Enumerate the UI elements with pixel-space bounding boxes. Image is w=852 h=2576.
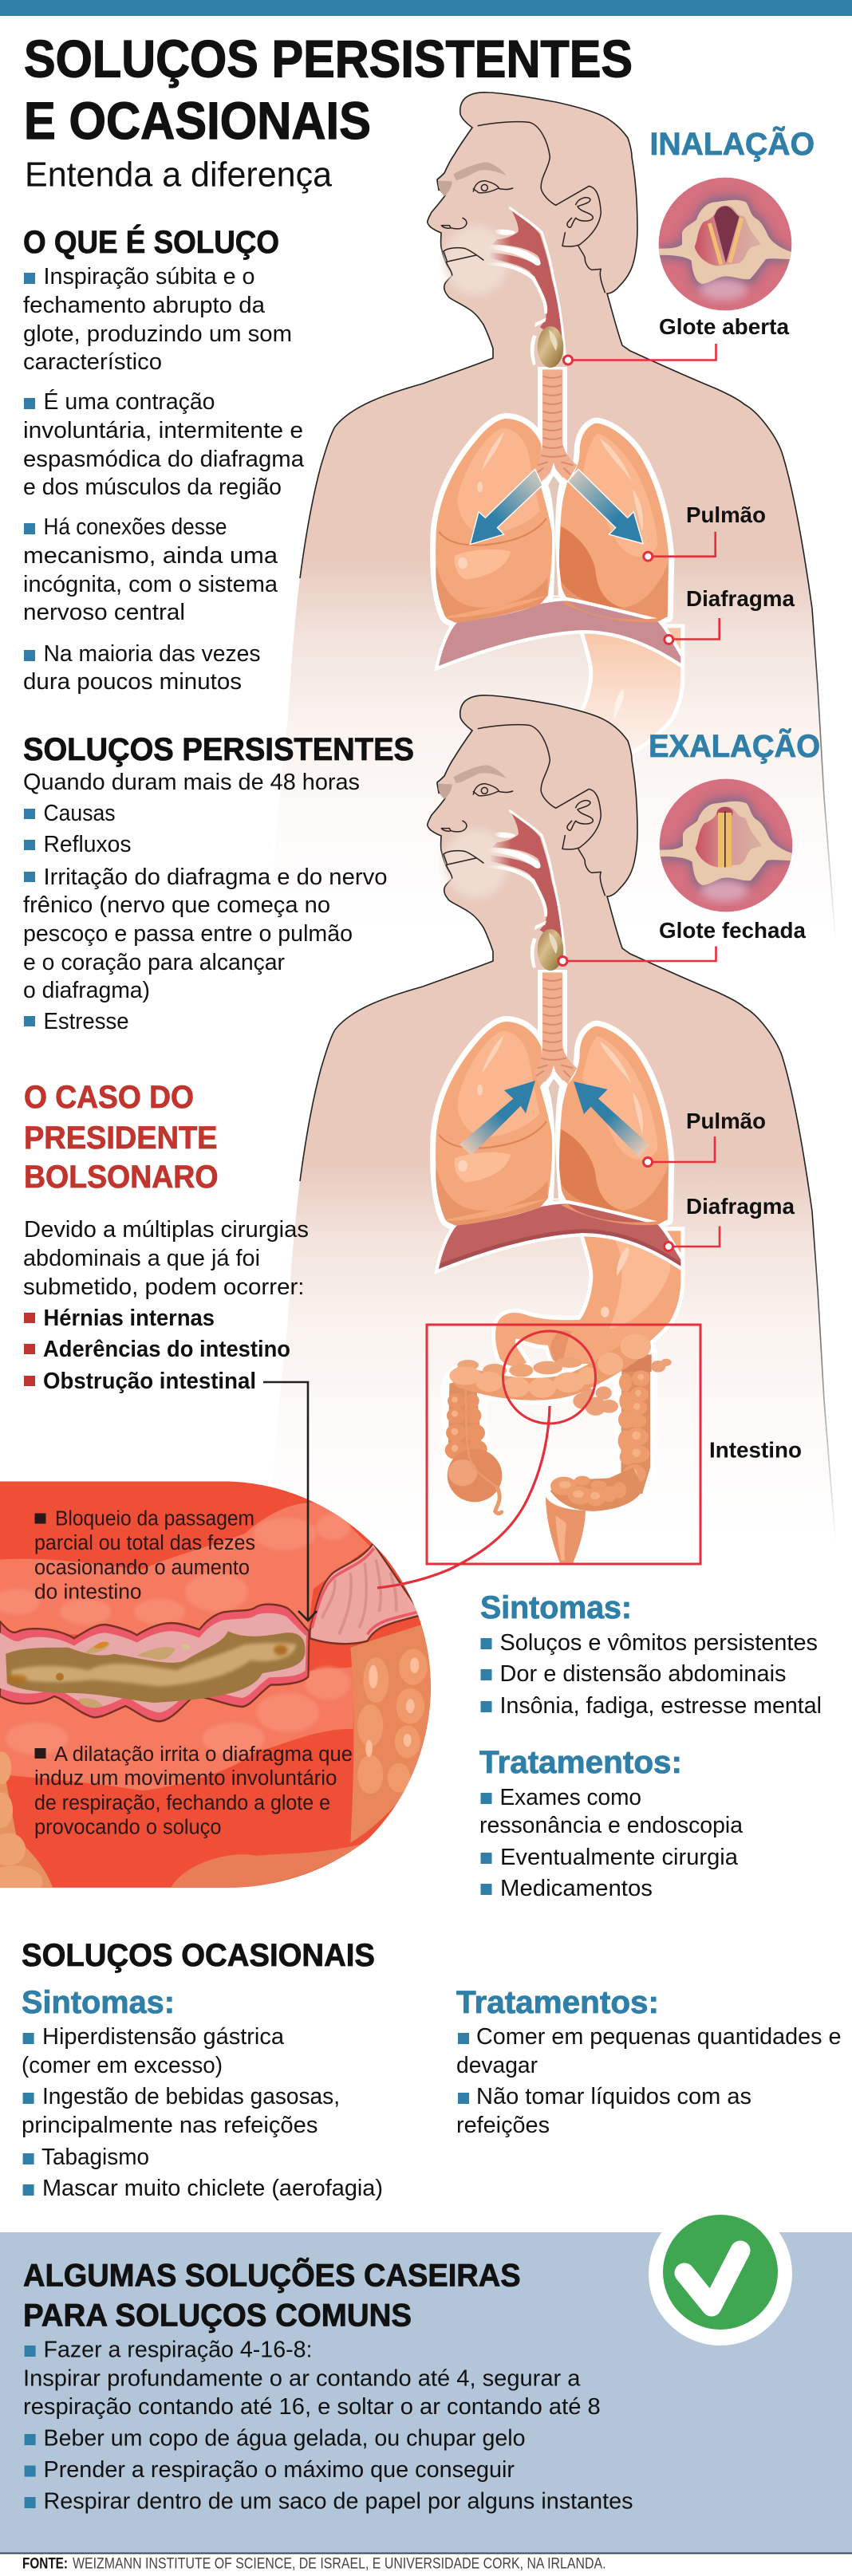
inset: glottis open	[659, 178, 791, 310]
list: tratamentos: Não tomar líquidos com as	[476, 2084, 751, 2109]
heading: SOLUÇOS OCASIONAIS	[22, 1938, 375, 1973]
panel: soluços persistentes	[23, 732, 414, 1034]
list: sintomas	[22, 2024, 383, 2201]
list: tratamentos: Comer em pequenas quantidades e	[476, 2024, 841, 2050]
bullet 4: Na maioria das vezes	[43, 641, 260, 667]
bullet list in bold	[24, 1306, 290, 1394]
title: E OCASIONAIS	[24, 91, 371, 150]
stomach (faded)	[495, 628, 680, 763]
subheading: sintomas: Sintomas:	[22, 1985, 175, 2020]
bullet list: Irritação do diafragma e do nervo	[43, 865, 387, 890]
list: respiração contando até 16, e soltar o ar contando até 8	[23, 2394, 601, 2420]
list: tratamentos	[456, 2024, 841, 2138]
bullet list in bold: Obstrução intestinal	[43, 1369, 256, 1394]
panel: soluços ocasionais	[22, 1938, 841, 2201]
list: Eventualmente cirurgia	[500, 1845, 739, 1870]
bullet list: Estresse	[43, 1009, 129, 1034]
heading: BOLSONARO	[24, 1160, 219, 1195]
list	[23, 2338, 633, 2515]
arrow: from obstruction label to close-up	[263, 1382, 317, 1621]
heading: ALGUMAS SOLUÇÕES CASEIRAS	[23, 2257, 521, 2294]
list: sintomas: Tabagismo	[41, 2145, 149, 2170]
bullet 2	[23, 388, 305, 500]
list	[480, 1630, 822, 1719]
bullet list: e o coração para alcançar	[23, 950, 285, 975]
heading: SOLUÇOS PERSISTENTES	[23, 732, 414, 767]
list: Medicamentos	[500, 1876, 653, 1901]
descending colon	[618, 1354, 652, 1494]
text: dilation: induz um movimento involuntário	[34, 1767, 337, 1790]
bullet 1: glote, produzindo um som	[23, 321, 292, 347]
list: tratamentos: devagar	[456, 2053, 538, 2078]
body silhouette with head	[271, 695, 838, 1600]
title	[24, 29, 633, 150]
heading: O CASO DO	[24, 1080, 194, 1115]
pancreas	[573, 1359, 672, 1416]
bullet 3: Há conexões desse	[43, 514, 227, 540]
bullet list: pescoço e passa entre o pulmão	[23, 921, 353, 947]
heading: Tratamentos:	[479, 1745, 682, 1780]
heading	[23, 2257, 521, 2334]
bullet list in bold: Hérnias internas	[43, 1306, 215, 1331]
top bar	[0, 0, 852, 16]
heading: O QUE É SOLUÇO	[23, 224, 279, 260]
red locator frame, circle and connector	[377, 1325, 700, 1588]
bullet list	[23, 801, 387, 1034]
label: diafragma: Diafragma	[686, 586, 795, 611]
text: dilation	[34, 1743, 353, 1839]
bullet 1	[23, 264, 292, 375]
list: sintomas: Mascar muito chiclete (aerofagia)	[42, 2176, 383, 2201]
throat, lungs and trachea	[436, 811, 669, 1225]
pointer: glote	[558, 946, 716, 965]
bullet list: Refluxos	[43, 832, 131, 857]
list: Prender a respiração o máximo que conseguir	[43, 2457, 515, 2483]
bullet 2: É uma contração	[43, 388, 215, 415]
panel: o caso do presidente	[23, 1080, 309, 1394]
text: blockage: Bloqueio da passagem	[55, 1508, 254, 1530]
source line	[0, 2552, 852, 2573]
pointer: pulmão	[644, 532, 716, 561]
text: blockage: ocasionando o aumento	[34, 1557, 250, 1579]
callout: intestinal obstruction close-up	[0, 1482, 433, 1898]
list: ressonância e endoscopia	[479, 1813, 744, 1838]
sigmoid colon	[550, 1467, 644, 1511]
panel: o que é soluço	[23, 224, 305, 695]
paragraph: Devido a múltiplas cirurgias	[24, 1217, 309, 1243]
list: Exames como	[499, 1785, 641, 1810]
intro: Quando duram mais de 48 horas	[23, 770, 360, 795]
arrows: air going out	[460, 1081, 649, 1157]
panel: sintomas persistentes	[480, 1590, 822, 1719]
text: blockage: parcial ou total das fezes	[34, 1532, 255, 1554]
panel background	[0, 2232, 852, 2553]
panel: tratamentos persistentes	[479, 1745, 744, 1901]
bullet 1: característico	[23, 349, 162, 375]
transverse colon	[449, 1333, 651, 1398]
inhalation labels	[563, 125, 815, 644]
paragraph: abdominais a que já foi	[23, 1246, 260, 1271]
bullet list: frênico (nervo que começa no	[23, 892, 330, 918]
heading: Sintomas:	[480, 1590, 632, 1625]
panel: soluções caseiras	[0, 2202, 852, 2553]
subheading: tratamentos: Tratamentos:	[456, 1985, 659, 2020]
bullet 4	[23, 641, 260, 695]
label: pulmão: Pulmão	[686, 502, 766, 527]
throat, lungs and trachea	[436, 208, 669, 622]
ascending colon	[445, 1381, 502, 1514]
list: tratamentos: refeições	[456, 2113, 550, 2138]
list: Beber um copo de água gelada, ou chupar gelo	[43, 2426, 525, 2452]
text: dilation: provocando o soluço	[34, 1817, 222, 1839]
bullet 3	[23, 514, 278, 625]
source line: WEIZMANN INSTITUTE OF SCIENCE, DE ISRAEL, E UNIVERSIDADE CORK, NA IRLANDA.	[73, 2556, 606, 2573]
list: Dor e distensão abdominais	[499, 1661, 787, 1687]
list: sintomas: Hiperdistensão gástrica	[42, 2024, 285, 2050]
diaphragm (contracted colour)	[439, 1199, 680, 1269]
bullet 3: nervoso central	[23, 600, 185, 625]
figure: body during exhalation	[271, 695, 838, 1600]
rectum	[546, 1497, 586, 1562]
label: intestino: Intestino	[709, 1438, 802, 1463]
list: sintomas: principalmente nas refeições	[22, 2113, 318, 2138]
bullet 1: Inspiração súbita e o	[43, 264, 255, 290]
label: diafragma: Diafragma	[686, 1194, 795, 1219]
heading: inalação: INALAÇÃO	[649, 125, 815, 162]
pointer: diafragma	[665, 618, 720, 644]
bullet 2: e dos músculos da região	[23, 475, 282, 500]
pointer: glote	[563, 344, 716, 364]
pointer: diafragma	[664, 1227, 720, 1251]
source line: FONTE:	[22, 2556, 68, 2573]
bullet list: o diafragma)	[23, 978, 150, 1003]
paragraph: submetido, podem ocorrer:	[23, 1274, 305, 1300]
icon: check mark	[649, 2202, 792, 2346]
list: Respirar dentro de um saco de papel por alguns instantes	[43, 2489, 633, 2515]
intestine tube	[0, 1605, 309, 1721]
list: sintomas: (comer em excesso)	[22, 2053, 223, 2078]
heading: PRESIDENTE	[24, 1121, 217, 1156]
label: glote aberta: Glote aberta	[659, 314, 789, 339]
bullet 3: mecanismo, ainda uma	[23, 543, 278, 569]
exhalation labels	[558, 727, 820, 1251]
stomach	[495, 1231, 680, 1366]
label: pulmão: Pulmão	[686, 1109, 766, 1133]
text: dilation: A dilatação irrita o diafragma que	[54, 1743, 353, 1766]
text: blockage: do intestino	[34, 1581, 142, 1603]
intestine illustration	[445, 1333, 672, 1562]
label: glote fechada: Glote fechada	[659, 918, 806, 943]
bubble illustration	[0, 1482, 433, 1898]
bullet list: Causas	[43, 801, 115, 826]
bullet 1: fechamento abrupto da	[23, 293, 266, 318]
bullet 2: espasmódica do diafragma	[23, 447, 305, 472]
list: Inspirar profundamente o ar contando até 4, segurar a	[23, 2366, 581, 2392]
list	[479, 1785, 744, 1901]
bullet list in bold: Aderências do intestino	[43, 1337, 290, 1362]
paragraph	[23, 1217, 309, 1300]
pointer: pulmão	[643, 1136, 715, 1166]
body silhouette with head	[271, 93, 838, 997]
text: blockage	[34, 1508, 255, 1603]
arrows: air going in	[470, 469, 643, 545]
list: Insônia, fadiga, estresse mental	[499, 1693, 822, 1719]
list: Soluços e vômitos persistentes	[499, 1630, 818, 1656]
inset: glottis closed	[660, 779, 792, 912]
title: SOLUÇOS PERSISTENTES	[24, 29, 633, 88]
headline	[24, 29, 633, 195]
heading	[24, 1080, 219, 1195]
bullet 2: involuntária, intermitente e	[23, 418, 303, 443]
heading: exalação: EXALAÇÃO	[649, 727, 820, 764]
diaphragm (relaxed colour)	[439, 596, 680, 666]
white halo behind the intestine	[445, 1348, 636, 1505]
bullet 3: incógnita, com o sistema	[23, 572, 278, 597]
subtitle: Entenda a diferença	[25, 155, 333, 195]
figure: body during inhalation	[271, 93, 838, 997]
text: dilation: de respiração, fechando a glote e	[34, 1792, 330, 1814]
list: sintomas: Ingestão de bebidas gasosas,	[42, 2084, 340, 2109]
bullet 4: dura poucos minutos	[23, 669, 242, 695]
heading: PARA SOLUÇOS COMUNS	[23, 2298, 412, 2334]
list: Fazer a respiração 4-16-8:	[43, 2338, 313, 2363]
